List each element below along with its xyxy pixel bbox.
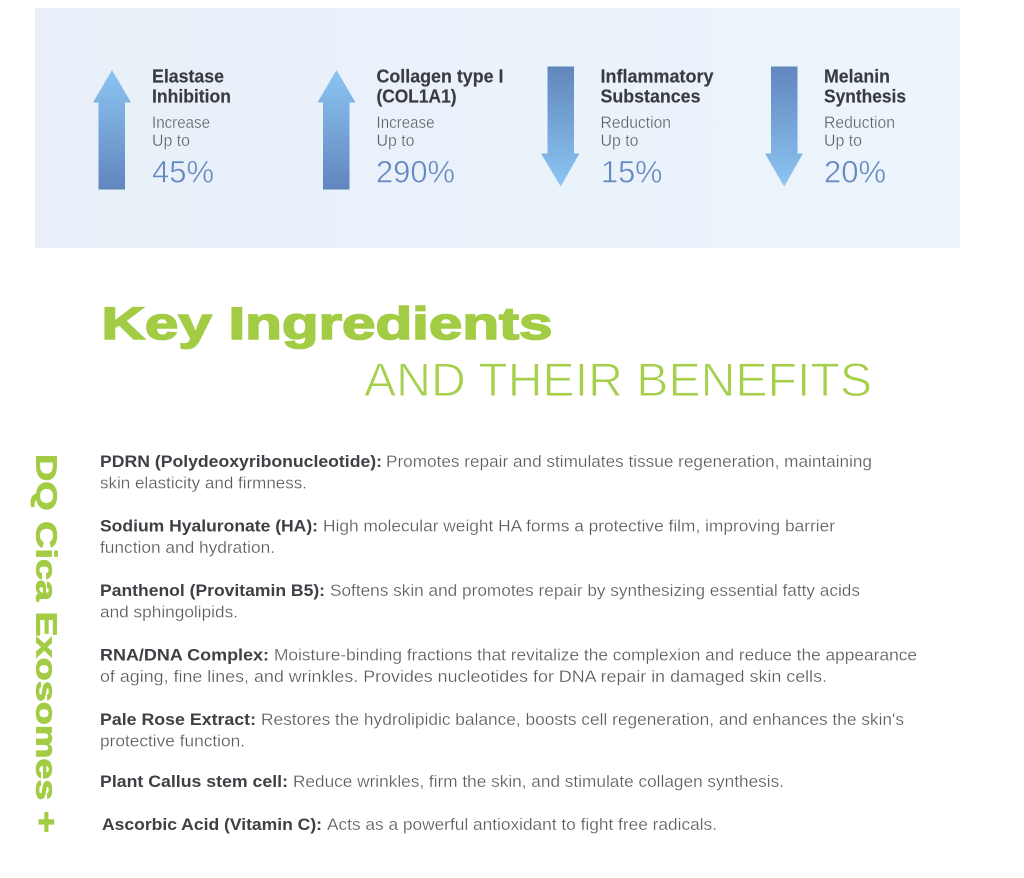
ingredient: RNA/DNA complex: RNA/DNA Complex: [100,646,269,664]
ingredient: PDRN [100,452,872,492]
ingredient: panthenol: Panthenol (Provitamin B5): [100,581,325,600]
stat: inflammatory substances [541,66,714,190]
ingredient: PDRN: Promotes repair and stimulates tissue regeneration, maintaining [386,452,872,471]
ingredient: plant callus stem cell: Reduce wrinkles, firm the skin, and stimulate collagen synthesis. [293,772,784,791]
stat: elastase inhibition [93,66,231,190]
icon: up arrow [318,70,356,190]
heading: key ingredients: Key Ingredients [102,298,552,349]
icon: down arrow [541,66,580,186]
ingredient: pale rose extract: Restores the hydrolipidic balance, boosts cell regeneration, and enhances the skin's [261,710,904,729]
stat value: 15% [601,154,662,190]
stat label: Increase [376,114,434,132]
stat label: Up to [824,132,862,150]
icon: down arrow [765,66,803,186]
ingredient: ascorbic acid: Acts as a powerful antioxidant to fight free radicals. [327,815,717,834]
vertical label: DQ Cica Exosomes +: DQ Cica Exosomes + [30,454,62,833]
stat label: Increase [152,114,210,132]
stat value: 45% [152,154,214,190]
stat heading: Elastase [152,66,224,86]
stat value: 20% [824,154,886,190]
ingredient: PDRN: skin elasticity and firmness. [100,474,307,492]
stat label: Up to [152,132,190,150]
ingredient: RNA/DNA complex: of aging, fine lines, and wrinkles. Provides nucleotides for DNA repair in damaged skin cells. [100,667,827,686]
ingredient: pale rose extract: Pale Rose Extract: [100,710,256,729]
stat heading: Substances [600,86,700,106]
ingredient: pale rose extract: protective function. [100,732,245,750]
ingredient: panthenol: and sphingolipids. [100,602,238,622]
ingredient: panthenol [100,581,860,622]
stat label: Up to [376,132,414,150]
ingredient: RNA/DNA complex: Moisture-binding fractions that revitalize the complexion and reduce the appearance [274,646,917,664]
ingredient: sodium hyaluronate: Sodium Hyaluronate (HA): [100,516,318,536]
stat: collagen type I [318,66,504,190]
stat label: Up to [600,132,638,150]
stat heading: Synthesis [824,86,906,106]
stat value: 290% [376,154,455,190]
icon: up arrow [93,70,131,190]
stat label: Reduction [600,114,671,132]
ingredient: panthenol: Softens skin and promotes repair by synthesizing essential fatty acids [330,581,860,600]
ingredient: ascorbic acid [102,815,717,834]
ingredient: pale rose extract [100,710,904,750]
panel: stats background [35,8,960,248]
ingredient: plant callus stem cell: Plant Callus stem cell: [100,772,288,791]
ingredient: RNA/DNA complex [100,646,917,686]
stat heading: Inflammatory [600,66,714,86]
subheading: and their benefits: AND THEIR BENEFITS [364,353,872,406]
ingredient: PDRN: PDRN (Polydeoxyribonucleotide): [100,452,382,471]
ingredient: ascorbic acid: Ascorbic Acid (Vitamin C): [102,815,322,834]
stat heading: Inhibition [152,86,231,106]
ingredient: sodium hyaluronate: High molecular weight HA forms a protective film, improving barrier [323,516,835,536]
stat label: Reduction [824,114,895,132]
stat heading: Melanin [824,66,890,86]
stat: melanin synthesis [765,66,906,190]
stat heading: Collagen type I [376,66,504,86]
ingredient: sodium hyaluronate [100,516,835,557]
stat heading: (COL1A1) [376,86,456,106]
ingredient: sodium hyaluronate: function and hydration. [100,538,275,557]
